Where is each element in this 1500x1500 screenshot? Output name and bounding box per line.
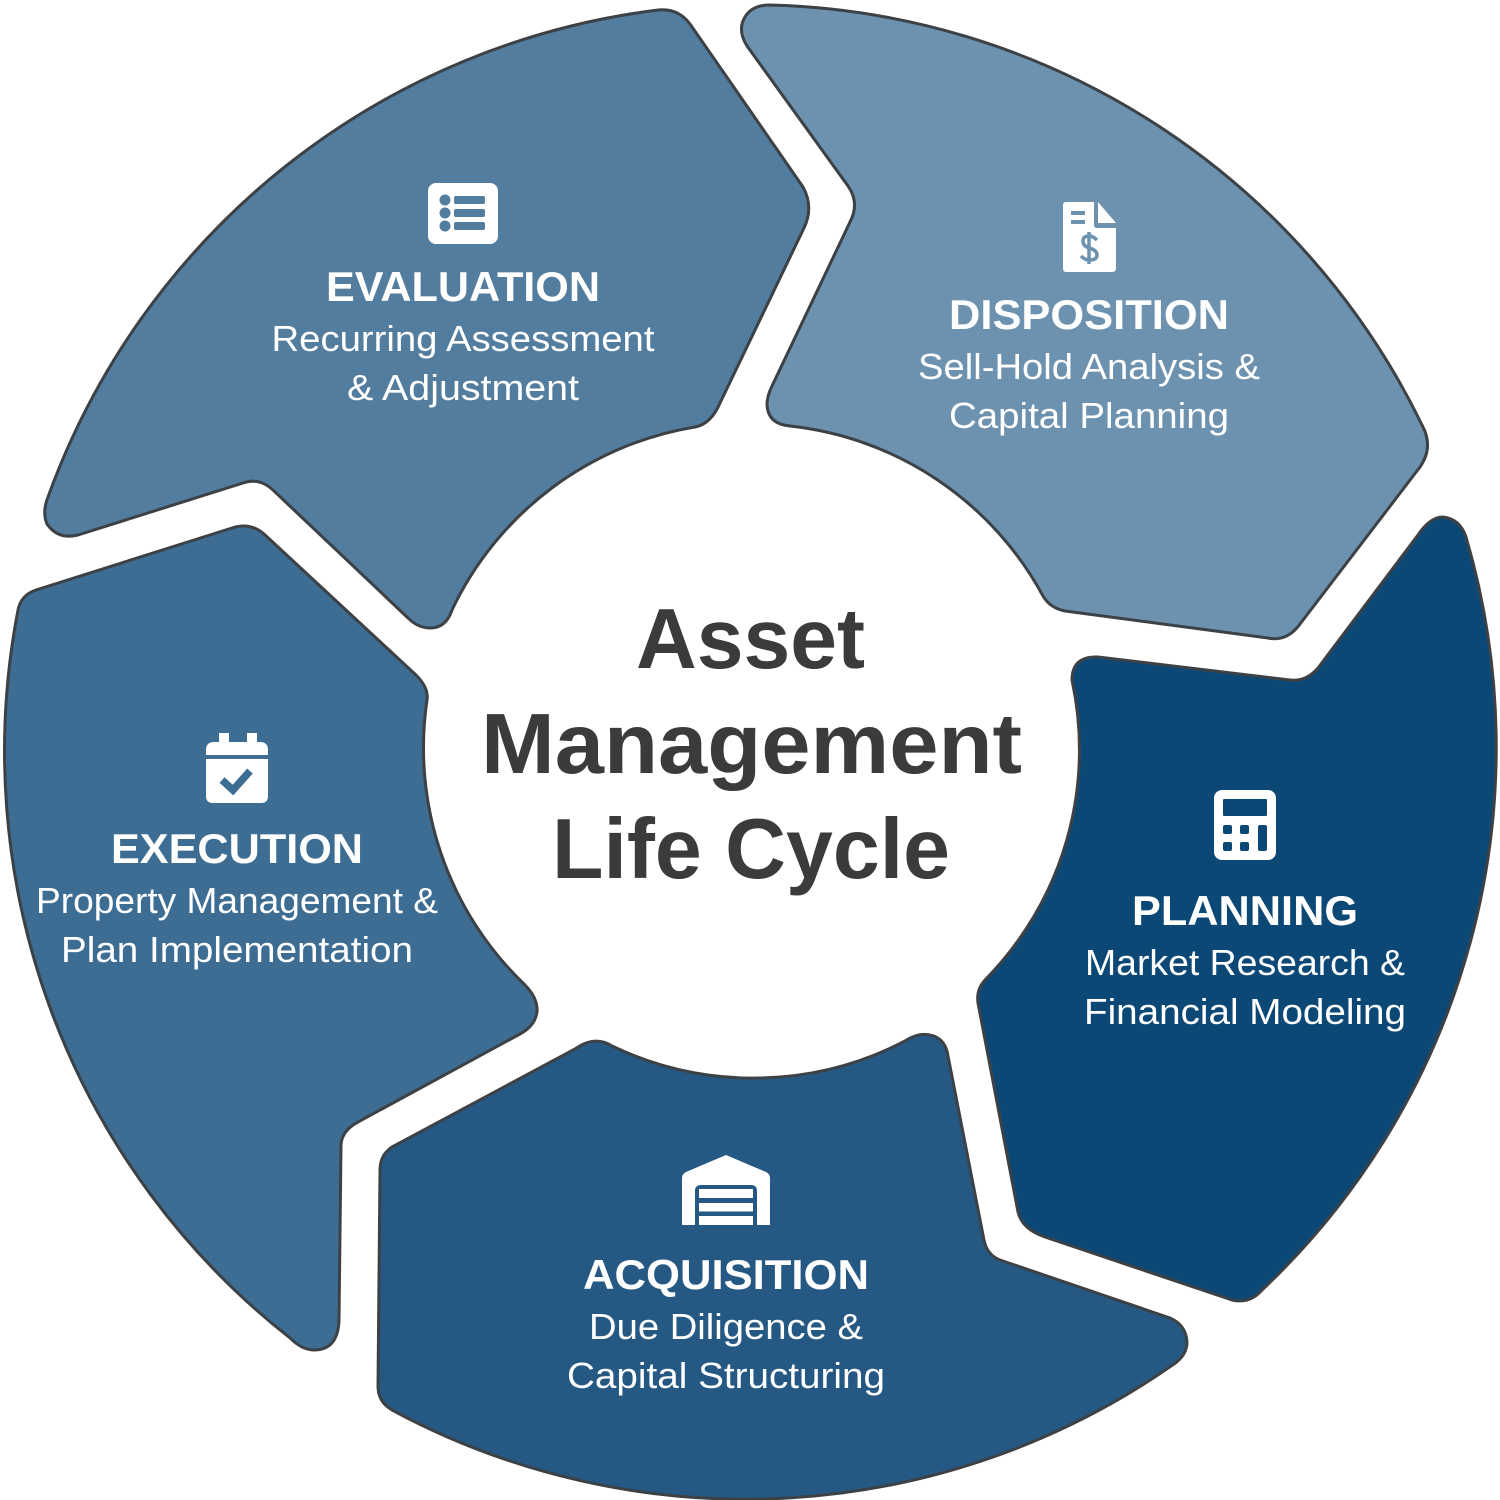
heading: execution: EXECUTION (111, 825, 363, 872)
heading: evaluation: EVALUATION (326, 263, 600, 310)
text: acquisition description: Due Diligence & (589, 1306, 863, 1347)
text: acquisition description (567, 1306, 885, 1396)
text: planning description (1084, 942, 1406, 1032)
text: execution description: Plan Implementation (61, 929, 413, 970)
text: execution description (36, 880, 438, 970)
icon: calculator (1214, 790, 1276, 860)
title: Asset (636, 592, 865, 687)
icon: invoice document (1063, 202, 1116, 272)
title: Management (481, 697, 1022, 792)
icon: warehouse (682, 1155, 770, 1225)
heading: acquisition: ACQUISITION (583, 1251, 869, 1298)
title: Life Cycle (552, 802, 950, 897)
panel: acquisition (378, 1034, 1187, 1499)
text: execution description: Property Management & (36, 880, 438, 921)
text: evaluation description (272, 318, 654, 408)
text: acquisition description: Capital Structuring (567, 1355, 885, 1396)
text: evaluation description: Recurring Assessment (272, 318, 654, 359)
panel: execution (5, 526, 537, 1350)
text: planning description: Financial Modeling (1084, 991, 1406, 1032)
text: evaluation description: & Adjustment (347, 367, 579, 408)
panel: disposition (741, 5, 1428, 639)
icon: checklist (428, 183, 498, 244)
heading: planning: PLANNING (1132, 887, 1358, 934)
panel: evaluation (45, 10, 809, 628)
text: disposition description (918, 346, 1260, 436)
heading: disposition: DISPOSITION (949, 291, 1229, 338)
text: planning description: Market Research & (1085, 942, 1405, 983)
text: disposition description: Capital Planning (949, 395, 1229, 436)
panel: planning (978, 517, 1496, 1301)
icon: calendar check (206, 733, 268, 803)
text: disposition description: Sell-Hold Analysis & (918, 346, 1260, 387)
title (481, 592, 1022, 897)
